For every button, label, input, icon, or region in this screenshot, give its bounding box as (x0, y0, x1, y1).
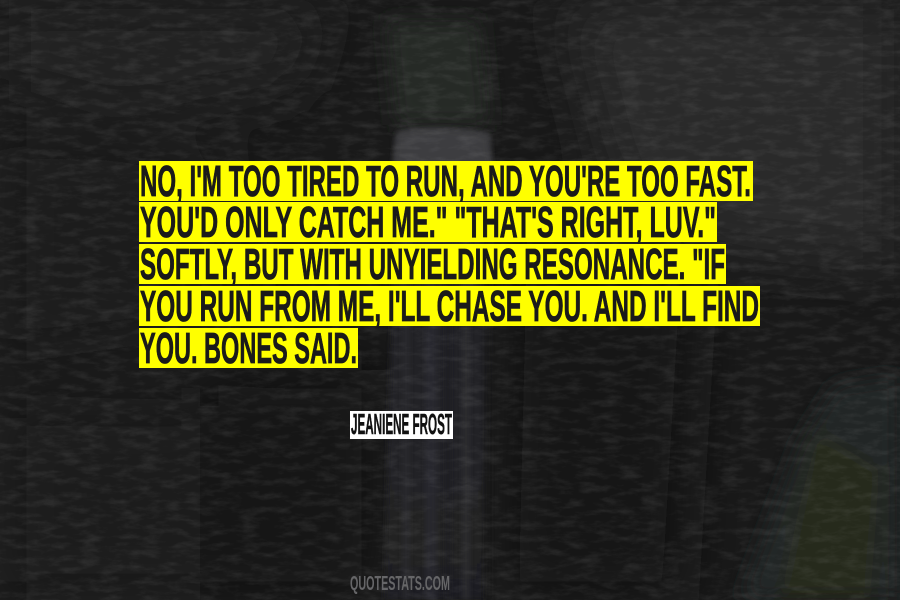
quote text on yellow bars (139, 157, 760, 373)
quote line 5 (139, 324, 358, 373)
quote line 5: YOU. BONES SAID. (140, 324, 357, 373)
waterfall (384, 128, 492, 600)
author label (350, 409, 453, 441)
text: JEANIENE FROST (351, 409, 452, 441)
watermark: QUOTESTATS.COM (350, 573, 450, 595)
foliage above the falls (385, 20, 900, 600)
